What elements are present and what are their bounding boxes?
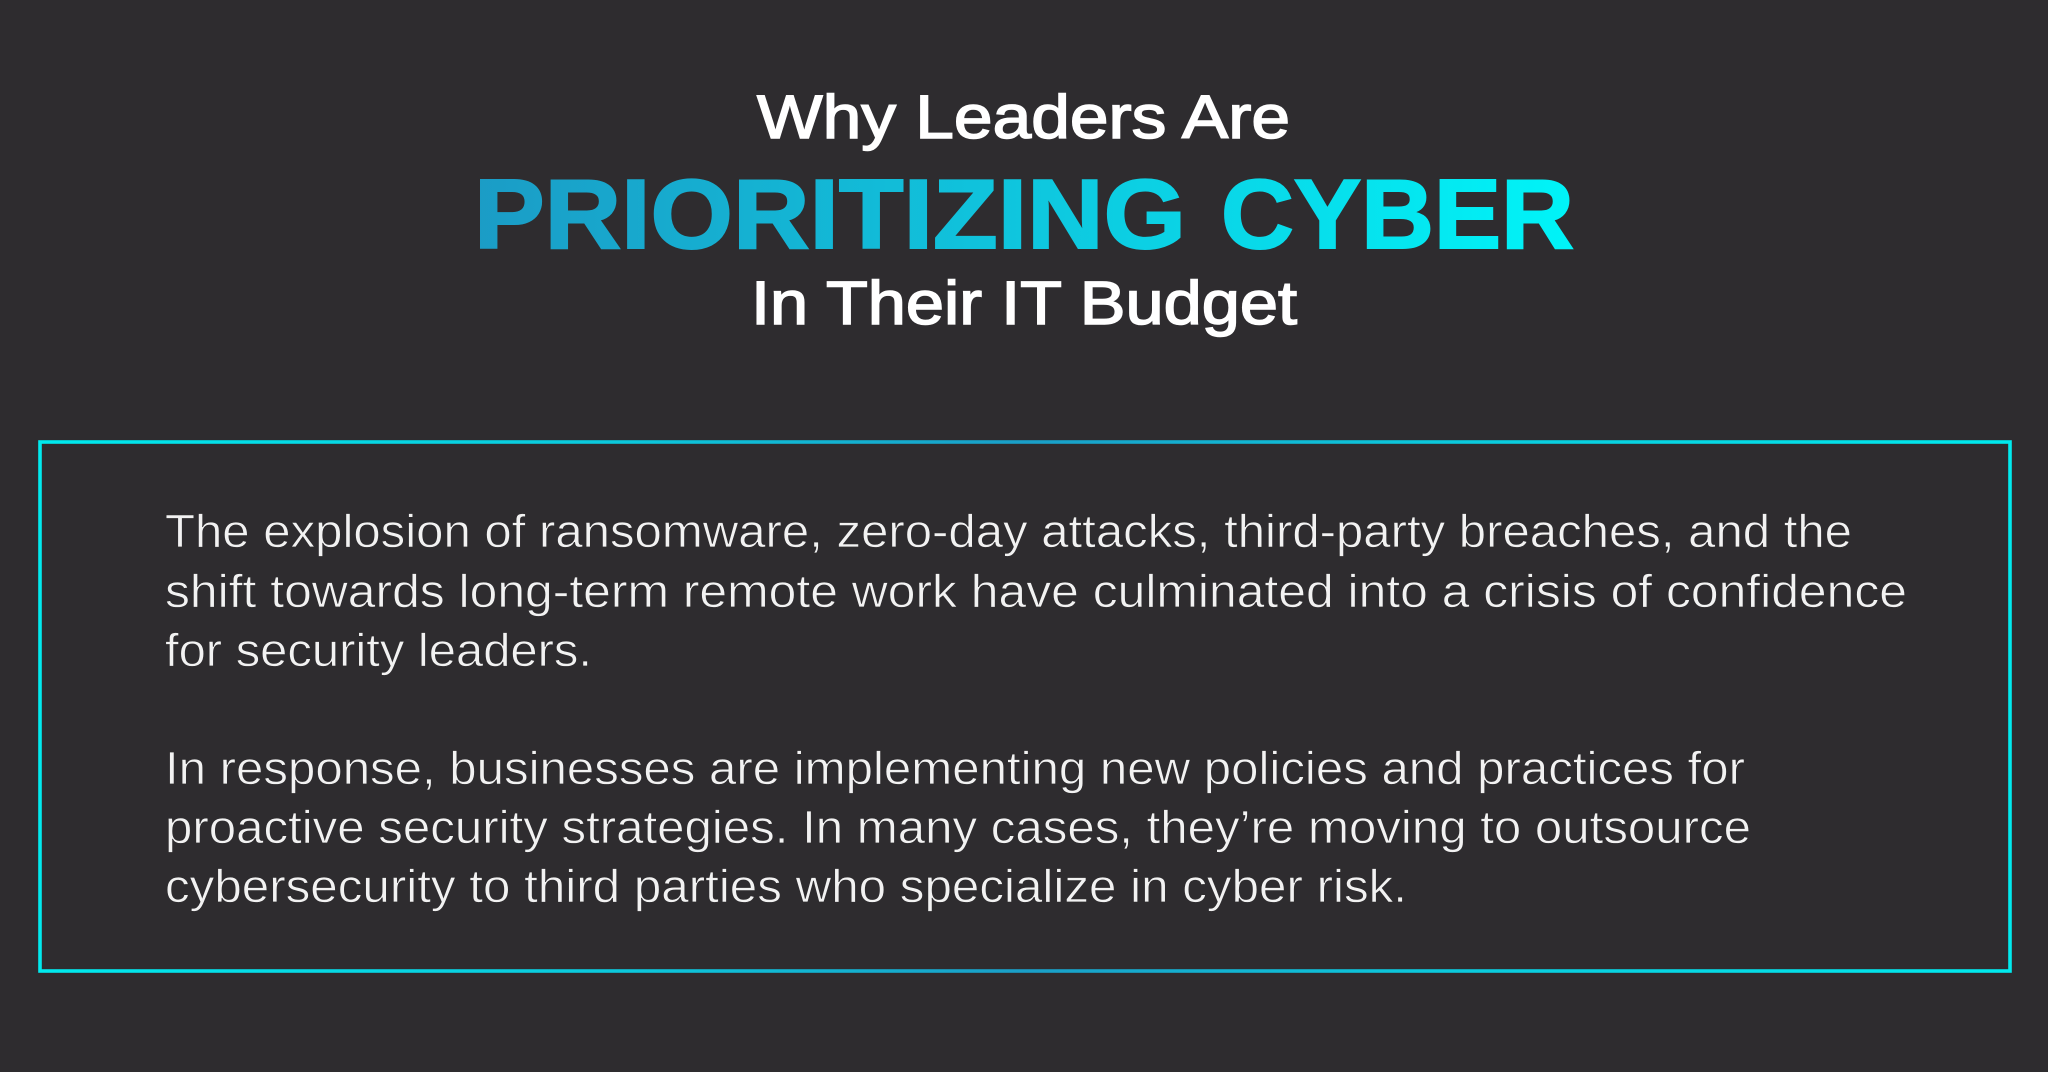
title line 3: In Their IT Budget [751,269,1297,337]
title line 2: highlighted: PRIORITIZING [474,159,1186,269]
panel: text box [40,442,2010,971]
paragraph 2: proactive security strategies. In many cases, they’re moving to outsource [165,801,1751,853]
title [474,83,1574,337]
title line 2: highlighted [474,159,1574,269]
paragraph 1 [165,505,1907,676]
paragraph 2: In response, businesses are implementing new policies and practices for [165,742,1745,794]
paragraph 1: The explosion of ransomware, zero-day attacks, third-party breaches, and the [165,505,1852,557]
paragraph 2 [165,742,1751,912]
paragraph 1: shift towards long-term remote work have culminated into a crisis of confidence [165,565,1907,617]
paragraph 2: cybersecurity to third parties who specialize in cyber risk. [165,860,1407,912]
paragraph 1: for security leaders. [165,624,592,676]
title line 2: highlighted: CYBER [1221,159,1574,269]
panel border [40,442,2010,971]
title line 1: Why Leaders Are [757,83,1290,151]
